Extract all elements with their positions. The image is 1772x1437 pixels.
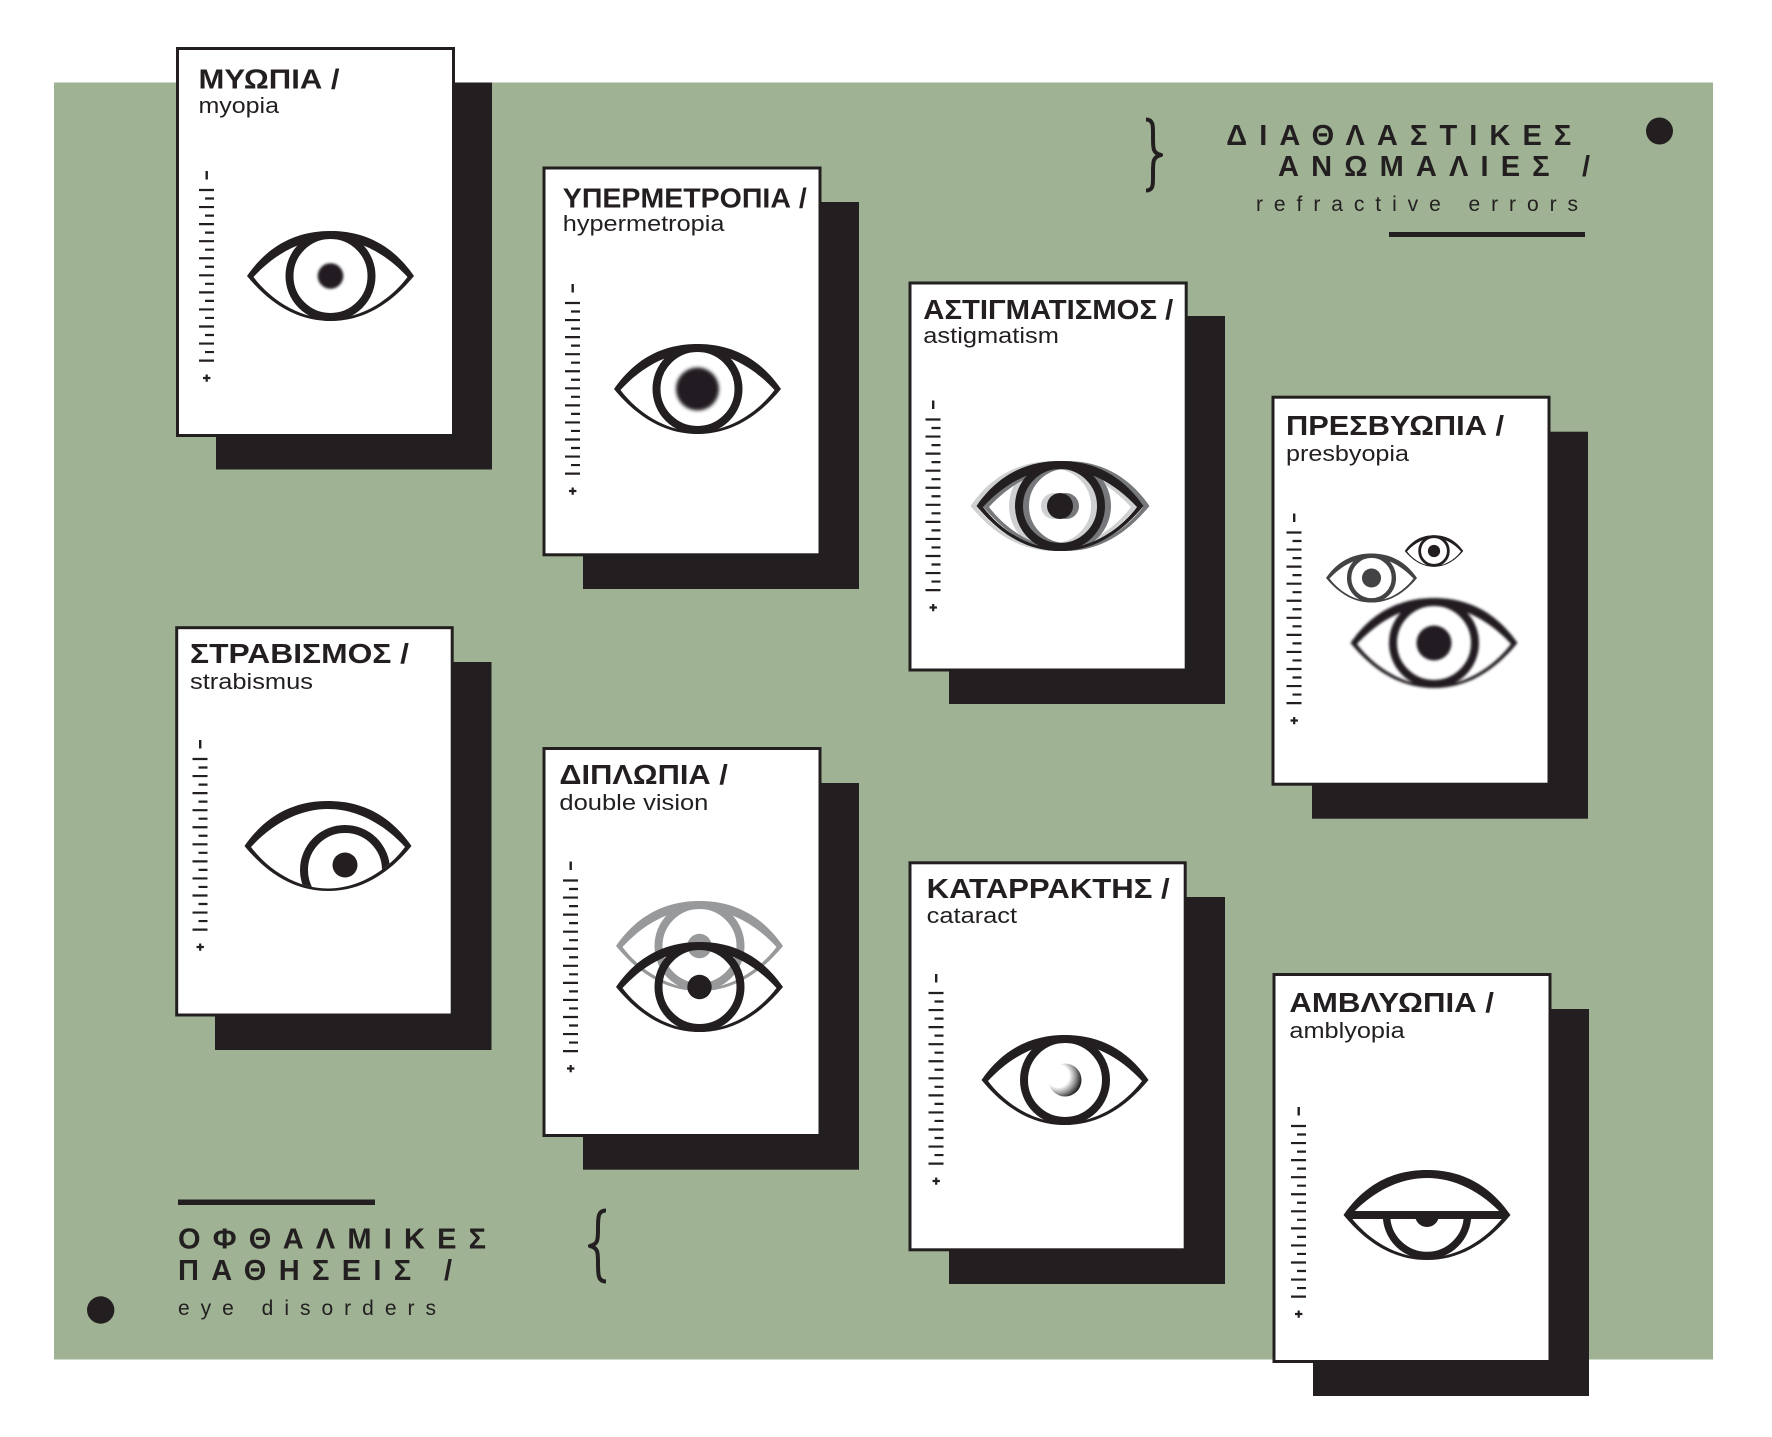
icon: eye with blurred pupil [247,231,414,321]
subtitle: presbyopia [1286,441,1410,466]
title: ΔΙΠΛΩΠΙΑ / [559,759,728,790]
title: ΠΡΕΣΒΥΩΠΙΑ / [1286,410,1504,441]
header: refractive errors [1146,118,1673,237]
dark copy [982,461,1150,551]
card shadow [215,662,492,1050]
card shadow [583,202,859,589]
subtitle: cataract [927,903,1017,928]
title: ΑΜΒΛΥΩΠΙΑ / [1289,987,1494,1018]
rule [1389,232,1585,237]
card body [910,863,1185,1250]
header: eye disorders [87,1200,606,1324]
card body [544,168,820,555]
scale [928,974,944,1185]
heading greek line 2: ΑΝΩΜΑΛΙΕΣ / [1278,151,1590,183]
scale [1286,514,1302,724]
card body [178,48,454,436]
card shadow [216,82,492,470]
subtitle: double vision [559,790,708,815]
small eye [1405,535,1463,567]
large blurred eye [1350,598,1518,688]
heading greek: ΔΙΑΘΛΑΣΤΙΚΕΣ [1226,120,1571,152]
scale [563,862,578,1072]
title: ΣΤΡΑΒΙΣΜΟΣ / [190,638,409,669]
icon: eye with ghosted copies [970,461,1150,551]
card: astigmatism [910,283,1225,704]
scale [199,171,214,382]
subtitle: amblyopia [1289,1018,1406,1043]
dot [87,1296,114,1324]
subtitle: hypermetropia [563,211,725,236]
icon: double eye [616,901,783,1032]
scale [565,284,580,495]
icon: eye with clouded pupil [982,1035,1148,1125]
card body [177,628,452,1015]
card: myopia [178,48,492,470]
card: strabismus [177,628,491,1050]
subtitle: astigmatism [923,323,1059,348]
scale [192,740,208,951]
rule [178,1200,375,1205]
card body [1273,397,1549,784]
medium eye [1326,553,1417,603]
heading greek: ΟΦΘΑΛΜΙΚΕΣ [178,1224,486,1256]
title: ΥΠΕΡΜΕΤΡΟΠΙΑ / [563,182,807,213]
main eye [976,461,1144,551]
card: double vision [544,748,859,1170]
title: ΜΥΩΠΙΑ / [198,64,340,94]
card: cataract [910,863,1225,1284]
heading english: eye disorders [178,1297,436,1320]
subtitle: myopia [198,93,280,118]
card shadow [1312,432,1588,819]
heading english: refractive errors [1256,193,1578,216]
card: presbyopia [1273,397,1588,819]
card body [910,283,1186,670]
card: amblyopia [1274,974,1589,1396]
icon: eye with displaced iris [244,801,412,891]
icon: eye with drooping lid [1344,1170,1510,1260]
light copy [970,461,1138,551]
card: hypermetropia [544,168,859,589]
subtitle: strabismus [190,669,313,694]
title: ΑΣΤΙΓΜΑΤΙΣΜΟΣ / [923,294,1174,325]
card body [544,748,820,1136]
card shadow [949,316,1225,704]
icon: eye with large blurred pupil [614,344,781,434]
scale [1291,1107,1306,1318]
card shadow [1313,1009,1589,1396]
brace right [1146,120,1161,190]
card body [1274,974,1550,1362]
scale [926,400,940,611]
gray ghost eye [616,901,783,991]
card shadow [583,783,859,1170]
black eye [616,942,783,1032]
dot [1646,118,1673,144]
icon: three eyes at different sizes [1326,535,1518,688]
heading greek line 2: ΠΑΘΗΣΕΙΣ / [178,1255,452,1287]
card shadow [949,897,1225,1284]
brace left [590,1210,606,1282]
title: ΚΑΤΑΡΡΑΚΤΗΣ / [927,873,1170,904]
